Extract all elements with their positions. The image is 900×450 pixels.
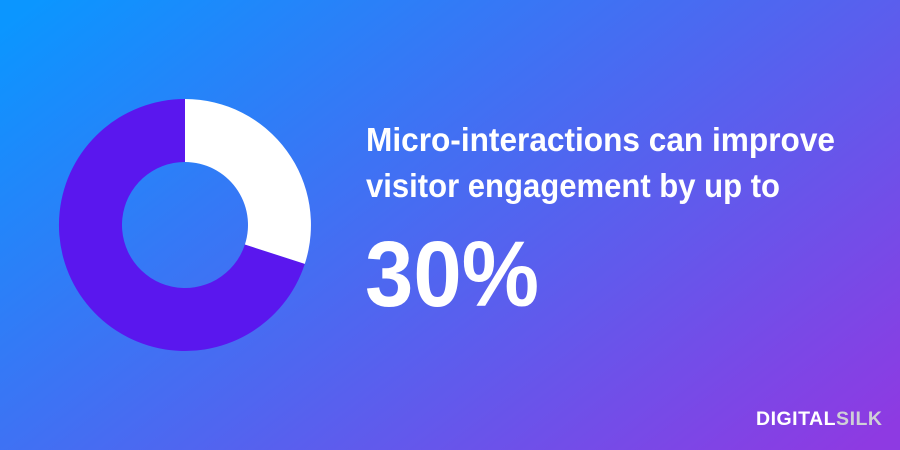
headline text: visitor engagement by up to [366, 167, 780, 204]
donut chart: 30 percent [59, 99, 311, 351]
headline text [366, 121, 835, 204]
headline text: Micro-interactions can improve [366, 121, 835, 158]
donut segment: remaining 70 percent [59, 99, 305, 351]
statistic: 30%: 30% [365, 222, 539, 326]
donut segment: 30 percent [185, 99, 311, 264]
logo: Digital Silk: DIGITALSILK [756, 408, 882, 430]
